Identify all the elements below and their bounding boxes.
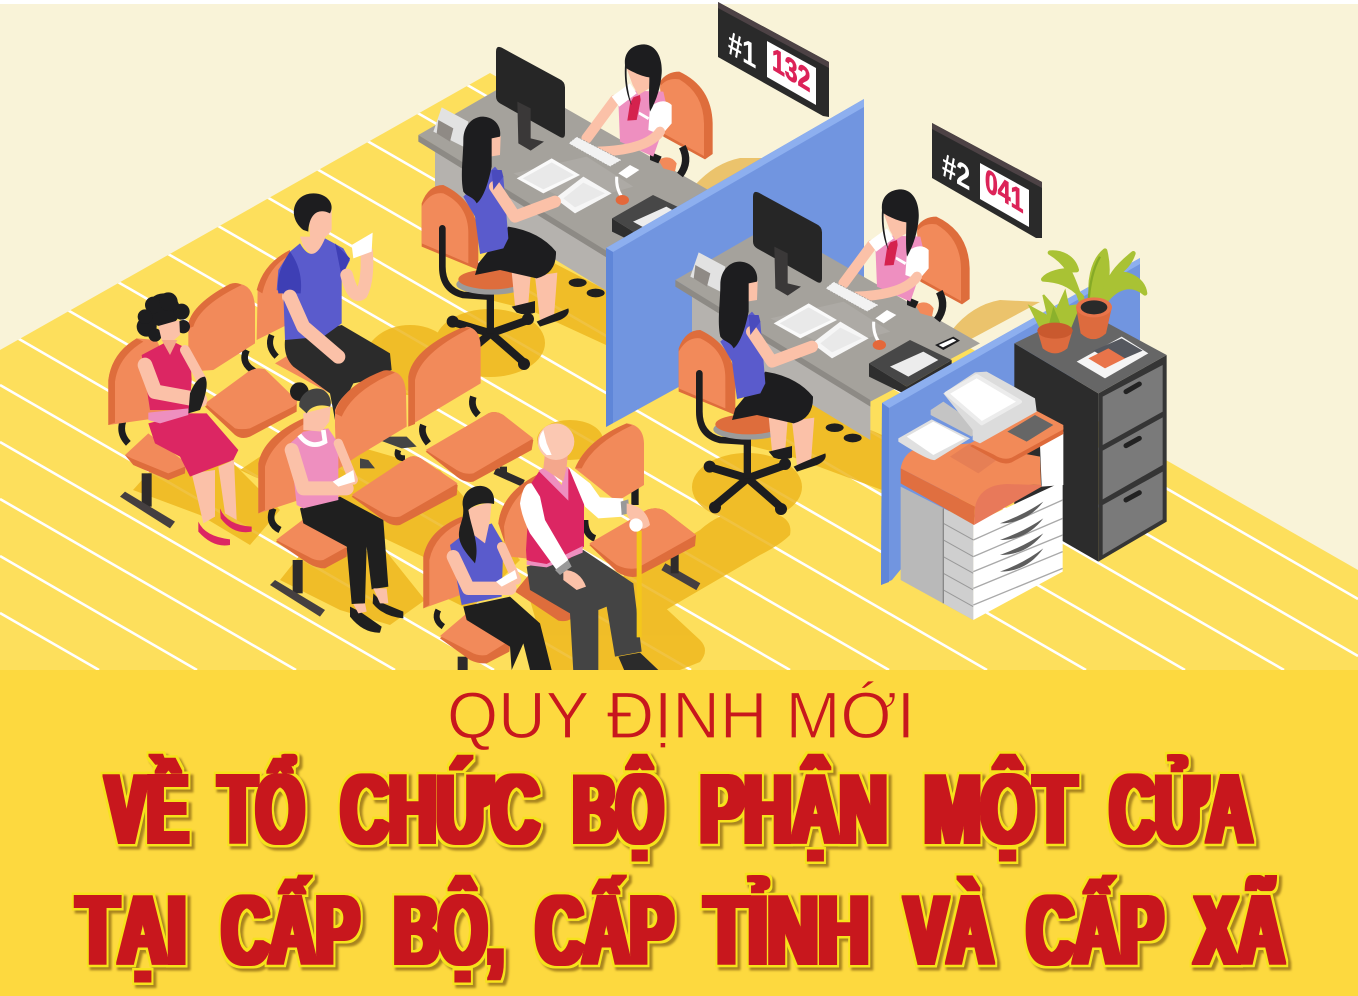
title banner bbox=[0, 670, 1358, 996]
headline line 2: TẠI bbox=[77, 875, 186, 985]
headline line 2: CẤP bbox=[222, 875, 359, 985]
headline line 2: CẤP bbox=[536, 875, 673, 985]
empty chairs row right bbox=[335, 327, 533, 525]
document tray 1 bbox=[612, 195, 695, 250]
desk 1 bbox=[418, 79, 723, 297]
wall shadow bumps behind desks bbox=[695, 158, 1040, 345]
customer 1 in swivel chair bbox=[422, 117, 569, 370]
brochure on cabinet bbox=[1077, 337, 1148, 378]
headline line 1: CHỨC bbox=[341, 754, 539, 864]
document tray 2 bbox=[869, 340, 952, 395]
page background wall bbox=[0, 4, 1358, 674]
chair under pink woman bbox=[258, 418, 347, 617]
woman in pink top bbox=[290, 382, 403, 633]
middle chair bbox=[498, 475, 603, 621]
headline line 2: VÀ bbox=[905, 875, 993, 985]
far chair bbox=[575, 423, 698, 587]
small potted plant bbox=[1030, 292, 1079, 353]
workstation 2 bbox=[675, 189, 980, 515]
counter sign 1 bbox=[718, 2, 829, 117]
large potted plant bbox=[1043, 251, 1145, 339]
customer 2 in swivel chair bbox=[679, 262, 826, 515]
counter sign 2: #2 bbox=[942, 144, 970, 198]
phone bbox=[935, 337, 960, 350]
desk 2 bbox=[675, 224, 980, 442]
partition 1 bbox=[606, 99, 864, 427]
filing cabinet bbox=[1014, 310, 1167, 562]
headline line 1: CỬA bbox=[1110, 754, 1252, 864]
headline line 1: BỘ bbox=[573, 754, 663, 864]
woman in red dress bbox=[137, 292, 252, 546]
old man bbox=[520, 423, 658, 672]
headline line 1: MỘT bbox=[924, 754, 1076, 864]
two-seat chair row left bbox=[108, 283, 297, 528]
headline line 2: CẤP bbox=[1027, 875, 1163, 985]
monitor 2 bbox=[753, 192, 822, 296]
counter sign 2 bbox=[932, 123, 1042, 238]
old man with chairs and cane bbox=[498, 423, 698, 672]
headline line 2: XÃ bbox=[1195, 875, 1284, 985]
copier body bbox=[901, 482, 1063, 620]
subtitle: quy dinh moi: QUY ĐỊNH MỚI bbox=[447, 678, 915, 752]
seated man bbox=[277, 193, 417, 468]
floor with diagonal stripes bbox=[0, 73, 1358, 670]
headline line 2: TỈNH bbox=[705, 875, 869, 985]
headline line 1 bbox=[106, 754, 1252, 864]
counter sign 1: #1 bbox=[728, 22, 756, 76]
waiting area bbox=[108, 193, 533, 633]
headline line 1: PHẬN bbox=[700, 754, 887, 864]
workstation 1 bbox=[418, 44, 723, 370]
headline line 2 bbox=[77, 875, 1284, 985]
teller 2 bbox=[844, 189, 970, 320]
monitor 1 bbox=[496, 47, 565, 151]
teller 1 bbox=[587, 44, 713, 175]
desk items 2 bbox=[690, 252, 896, 358]
young woman bbox=[450, 486, 552, 670]
front chair bbox=[423, 517, 511, 670]
floor shadows bbox=[133, 230, 882, 670]
counter sign 2: 041 bbox=[985, 162, 1023, 221]
waiting chair, man bbox=[257, 250, 362, 393]
headline line 1: TỔ bbox=[219, 754, 304, 864]
counter sign 1: 132 bbox=[772, 41, 810, 100]
headline line 1: VỀ bbox=[106, 754, 188, 864]
copier top and scanner bbox=[898, 372, 1063, 525]
front chair with young woman bbox=[423, 486, 552, 670]
desk items 1 bbox=[433, 107, 639, 213]
headline line 2: BỘ, bbox=[394, 875, 504, 985]
side furniture bbox=[901, 251, 1167, 620]
partition 2 bbox=[881, 258, 1140, 585]
